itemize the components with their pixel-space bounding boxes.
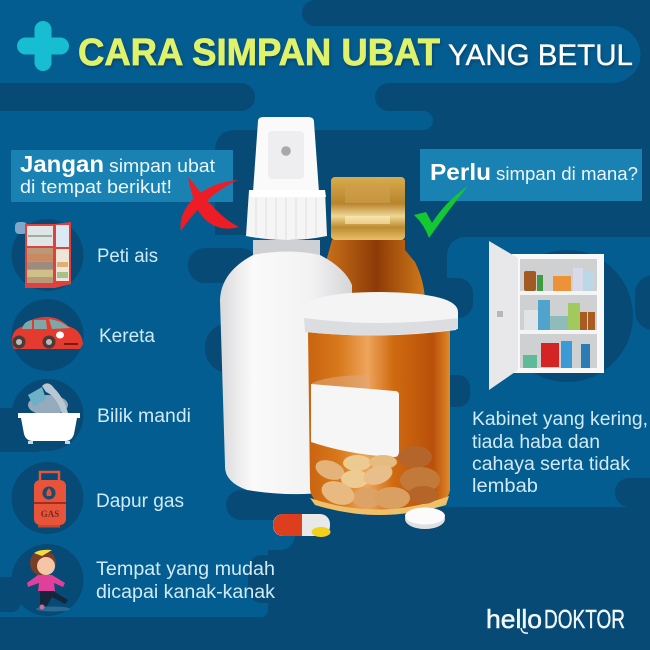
panel: perlu header: simpan di mana? [496,164,638,184]
pills [313,446,440,509]
list item: car [12,299,155,371]
list item: gas [12,462,184,534]
list item: fridge [12,219,158,291]
panel: perlu header [420,149,642,201]
cabinet description: lembab [472,476,538,497]
list item: child [12,544,276,616]
list item: fridge: Peti ais [97,246,158,267]
list item: car: Kereta [99,326,155,347]
capsule [273,514,330,537]
panel: perlu header: Perlu [430,159,491,185]
cabinet description [472,409,648,497]
icon: plus [17,21,69,71]
list item: child: dicapai kanak-kanak [96,582,276,603]
title: YANG BETUL [448,39,633,72]
list item: gas: GAS [41,509,59,519]
title: CARA SIMPAN UBAT [78,32,440,74]
list item: bath [12,379,191,451]
panel: jangan header [11,150,233,202]
logo: hello [486,604,542,634]
list item: bath: Bilik mandi [97,406,191,427]
title [17,21,633,74]
list item: child: Tempat yang mudah [96,559,275,580]
logo [486,604,625,634]
panel: jangan header: simpan ubat [109,156,215,176]
cabinet description: Kabinet yang kering, [472,409,648,430]
cabinet description: tiada haba dan [472,432,600,453]
panel: jangan header: di tempat berikut! [20,177,172,197]
icon: green check [414,186,468,238]
pill bottle [303,292,458,515]
icon: medicine cabinet [489,241,604,390]
cabinet description: cahaya serta tidak [472,454,631,475]
spray bottle [220,117,352,494]
icon: red cross [181,177,239,231]
amber bottle [327,177,425,300]
panel: jangan header: Jangan [20,151,104,177]
list item: gas: Dapur gas [96,491,184,512]
tablet [405,508,445,529]
